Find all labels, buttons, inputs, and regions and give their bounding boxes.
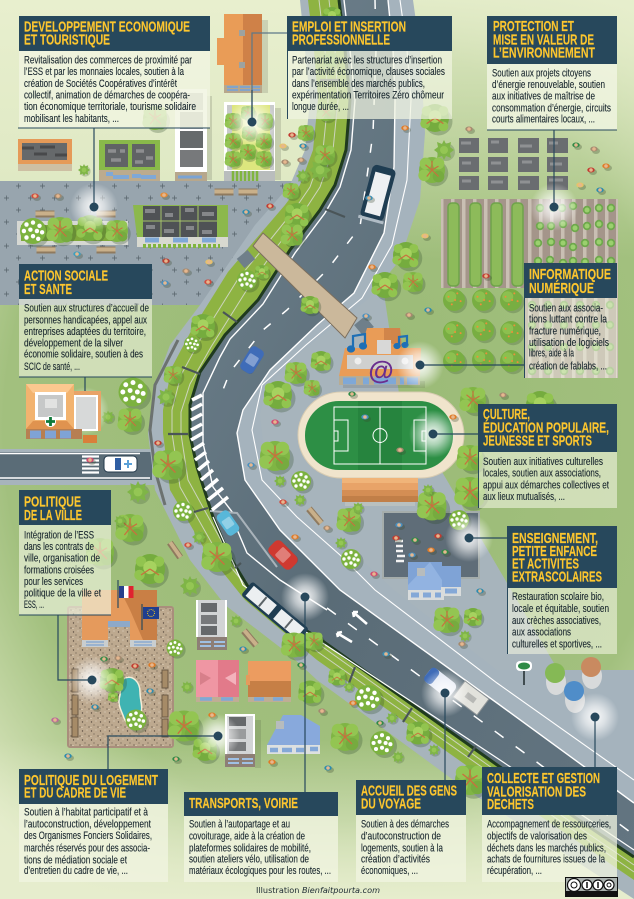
heading [19,490,111,525]
panel: politique de la ville [19,490,111,616]
heading: NUMÉRIQUE [529,280,594,297]
text block: libres, aide à la [529,348,574,360]
median posts [168,80,476,757]
text block [24,807,152,877]
text block [512,591,609,651]
building: orange small [18,139,72,171]
text block: Soutien aux associa- [529,303,603,315]
heading: POLITIQUE DU LOGEMENT [24,772,158,789]
heading: TRANSPORTS, VOIRIE [189,795,298,812]
heading: DECHETS [487,796,534,813]
heading: ACTION SOCIALE [24,268,108,285]
sidewalk left [148,0,634,899]
heading: ACCUEIL DES GENS [361,783,457,800]
credit line: Illustration Bienfaitpourta.com [256,886,380,895]
car cyan [215,509,241,537]
marker: logement [108,714,240,769]
text block: plateformes solidaires de mobilité, [189,843,311,855]
text block: économiques, ... [361,865,418,877]
blue school building [408,562,461,600]
text block: tions luttant contre la [529,314,607,326]
benches on plaza [36,188,258,254]
panel: transports [184,792,338,882]
heading: DE LA VILLE [24,507,82,524]
text block [492,68,611,126]
panel: culture [478,404,617,508]
people [31,126,612,773]
building: roof garden [224,102,281,181]
text block: l’ESS et par les monnaies locales, soutien à la [24,66,184,78]
marker: collecte [571,693,619,767]
heading: PROTECTION ET [493,18,574,35]
text block [24,303,149,373]
side road [0,449,155,485]
orchard [443,289,524,374]
text block: politique de la ville et [24,588,102,600]
building: culture music house [339,328,425,388]
text block: aux initiatives de maîtrise de [492,90,595,102]
car red [266,538,300,572]
heading [184,792,338,816]
text block: d’entretien du cadre de vie, ... [24,865,128,877]
text block [189,819,331,877]
panel: emploi [287,16,452,119]
hatch [191,395,228,510]
edge lines [190,0,634,857]
heading [19,264,152,299]
heading [19,16,210,51]
heading: POLITIQUE [24,494,81,511]
icon: green cross [45,416,56,427]
text block: tion économique territoriale, tourisme solidaire [24,101,196,113]
text block: l’autoconstruction, développement [24,819,152,831]
building: tall grey [175,89,212,181]
solar panels [459,138,568,190]
heading [478,404,617,452]
hospital building [26,384,101,443]
marker: action sociale [61,377,109,435]
vehicles [104,164,489,715]
text block: soutien ateliers vélo, utilisation de [189,854,309,866]
text block [24,54,196,125]
text block: dans les contrats de [24,541,94,553]
heading [482,767,617,815]
text block: pour les services [24,576,83,588]
schoolyard [383,512,479,578]
connectors and glow markers [58,33,619,792]
text block: entreprises adaptées du territoire, [24,326,146,338]
marker: transports [281,573,329,792]
text block: récupération, ... [487,865,542,877]
panel: collecte dechets [482,767,617,882]
plaza [0,181,312,305]
car blue [238,345,266,375]
marker: emploi [228,33,287,146]
text block [24,529,102,611]
text block: tions de médiation sociale et [24,854,128,866]
text block: objectifs de valorisation des [487,830,587,842]
car and trailer [422,666,458,699]
text block: Soutien à l’autopartage et au [189,819,290,831]
residential buildings [196,600,320,768]
marker: enseignement [445,514,507,562]
text block: aux lieux mutualisés, ... [483,491,565,503]
text block: ESS, ... [24,599,44,611]
text block: économie solidaire, soutien à des [24,348,143,360]
sports hall [342,478,418,506]
text block: personnes handicapées, appel aux [24,314,147,326]
heading [356,780,466,815]
heading [19,769,168,804]
dark kerb [150,340,178,505]
text block: dans l’ensemble des marchés publics, [292,78,425,90]
building grey 2 [225,714,261,768]
marker: politique ville [58,615,116,704]
stadium [298,392,464,478]
recycling bins [545,657,602,713]
ambulance [104,456,137,472]
text block: Revitalisation des commerces de proximité par [24,54,192,66]
text block: longue durée, ... [292,101,349,113]
building blue [267,715,320,754]
marker: informatique [396,341,524,389]
text block: Partenariat avec les structures d’insertion [292,54,442,66]
text block: développement de la silver [24,338,123,350]
heading: ET ACTIVITES [512,556,579,573]
heading: ET SANTE [24,281,72,298]
text block: marchés réservés pour des associa- [24,843,150,855]
text block: Soutien aux projets citoyens [492,68,591,80]
town hall square [68,580,173,747]
text block: logements, soutien à la [361,843,443,855]
text block [529,303,609,372]
icon: music notes [348,334,408,352]
text block [361,819,449,877]
trees middle [85,314,558,597]
panel: action sociale [19,264,152,378]
panel: accueil gens du voyage [356,780,466,882]
bus [241,581,309,643]
text block: matériaux écologiques pour les routes, ... [189,865,331,877]
building grey 1 [196,600,227,650]
text block: formations croisées [24,564,94,576]
median [163,0,634,880]
text block [487,819,611,877]
text block: d’autoconstruction de [361,830,441,842]
trees upper [78,7,455,316]
bus van [358,164,398,224]
bridge [237,233,374,338]
text block: Soutien à l’habitat participatif et à [24,807,148,819]
marker: culture [409,410,478,458]
heading [487,16,617,64]
heading [507,526,617,588]
heading: ET DU CADRE DE VIE [24,785,126,802]
heading: DEVELOPPEMENT ECONOMIQUE [24,18,190,36]
text block: Soutien aux structures d’accueil de [24,303,149,315]
text block: SCIC de santé, ... [24,361,80,373]
heading [524,263,617,298]
panel: logement [19,769,168,882]
building: central plaza [133,205,228,247]
text block: création d’activités [361,854,430,866]
building pink [196,660,239,702]
icon: at sign: @ [368,355,394,385]
heading: ET TOURISTIQUE [24,32,110,48]
vegetable garden [441,199,618,378]
text block [292,54,445,113]
heading: ENSEIGNEMENT, [512,530,598,547]
sign [516,661,532,685]
heading: DU VOYAGE [361,795,421,812]
text block: collectif, animation de démarches de coopéra- [24,90,190,102]
marker: protection [530,130,578,231]
text block: utilisation de logiciels [529,337,609,349]
heading: CULTURE, [483,406,530,423]
road [190,0,634,857]
planter with trees [17,215,131,247]
arrows on road [337,612,367,642]
panel: enseignement [507,526,617,654]
building wings [82,590,157,647]
square benches [72,669,168,737]
heading: PROFESSIONNELLE [292,32,390,48]
heading: EMPLOI ET INSERTION [292,18,406,36]
trees lower [166,607,489,799]
heading: L’ENVIRONNEMENT [493,44,595,62]
text block: Intégration de l’ESS [24,529,94,541]
pool [119,677,142,723]
text block: expérimentation Territoires Zéro chômeur [292,90,444,102]
icon: french flag [118,580,134,608]
text block: covoiturage, aide à la création de [189,830,305,842]
building orange [246,661,291,702]
text block: par l’activité économique, clauses sociales [292,66,445,78]
building: green roof [99,140,160,181]
panel: informatique [524,263,617,378]
text block: fracture numérique, [529,325,601,337]
building: orange tall [217,14,268,93]
text block: ville, organisation de [24,553,100,565]
text block: mobilisant les habitants, ... [24,113,119,125]
text block: création de Sociétés Coopératives d’intérêt [24,78,178,90]
marker: developpement [70,128,118,231]
marker: accueil [421,669,469,780]
heading: VALORISATION DES [487,784,586,801]
text block: aux associations [512,627,571,639]
text block: Soutien à des démarches [361,819,449,831]
heading [287,16,452,51]
bench pair [167,506,324,648]
panel: protection environnement [487,16,617,130]
panel: developpement economique [18,16,210,128]
cc license badge [565,877,618,897]
text block: des Organismes Fonciers Solidaires, [24,830,152,842]
text block [483,456,610,503]
icon: eu flag [142,604,159,630]
